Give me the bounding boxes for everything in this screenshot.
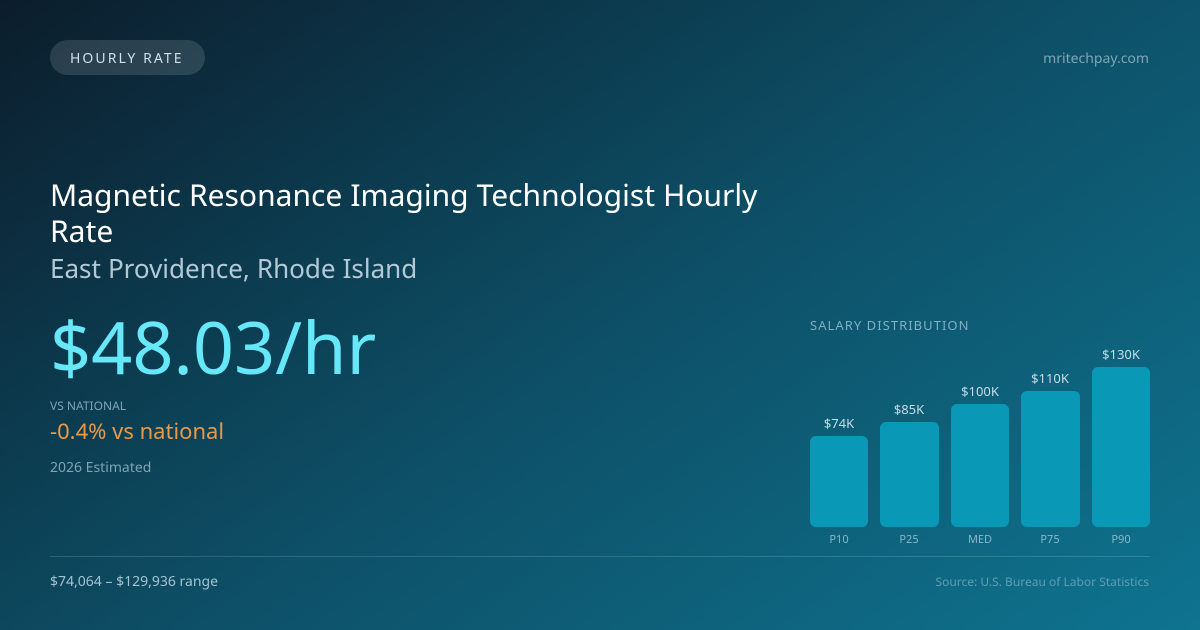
- badge: hourly rate: HOURLY RATE: [70, 49, 184, 68]
- bar: P90: P90: [1111, 532, 1131, 547]
- title: [50, 174, 758, 251]
- bar: P90: [1092, 345, 1150, 547]
- vs national value: -0.4% vs national: [50, 416, 224, 446]
- subtitle: location: East Providence, Rhode Island: [50, 250, 417, 286]
- bar: MED: MED: [968, 532, 992, 547]
- site name: mritechpay.com: [1043, 49, 1149, 68]
- bar: MED: $100K: [961, 382, 999, 400]
- bar: MED: [951, 382, 1009, 547]
- bar: P25: [880, 400, 939, 547]
- bar: P90: $130K: [1102, 345, 1140, 363]
- bar: P75: [1021, 369, 1080, 547]
- title: Rate: [50, 210, 113, 251]
- title: Magnetic Resonance Imaging Technologist Hourly: [50, 174, 757, 215]
- bar: P10: $74K: [824, 414, 854, 432]
- bar: P25: P25: [899, 532, 919, 547]
- source: Source: U.S. Bureau of Labor Statistics: [936, 573, 1149, 590]
- chart heading: SALARY DISTRIBUTION: [810, 316, 970, 334]
- main hourly value: $48.03/hr: [50, 298, 376, 396]
- bar: P75: $110K: [1031, 369, 1069, 387]
- bar: P10: [810, 414, 868, 547]
- estimate note: 2026 Estimated: [50, 458, 151, 477]
- vs national label: VS NATIONAL: [50, 397, 126, 414]
- bar: P75: P75: [1040, 532, 1060, 547]
- bar: P25: $85K: [894, 400, 924, 418]
- chart: salary distribution: [810, 316, 1150, 547]
- salary range: $74,064 – $129,936 range: [50, 572, 218, 591]
- bar: P10: P10: [829, 532, 849, 547]
- badge: hourly rate: [50, 40, 205, 75]
